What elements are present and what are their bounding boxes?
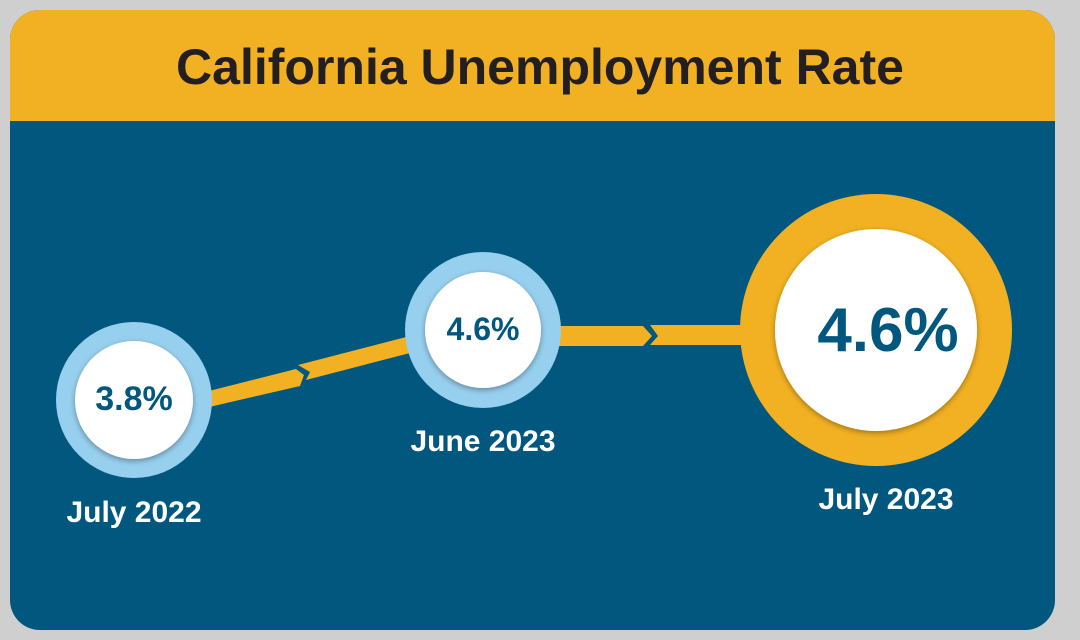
label: July 2022: July 2022 xyxy=(66,496,202,529)
circle: July 2023: 4.6% xyxy=(817,296,959,365)
label: July 2023: July 2023 xyxy=(818,483,954,516)
arrow: June 2023 to July 2023 xyxy=(555,325,760,346)
circle: July 2023 xyxy=(740,194,1012,466)
circle: July 2022: 3.8% xyxy=(95,380,173,418)
circle: July 2022 xyxy=(56,322,212,478)
circle: June 2023: 4.6% xyxy=(447,311,519,347)
title: California Unemployment Rate xyxy=(176,39,904,95)
header band xyxy=(10,10,1055,121)
circle: June 2023 xyxy=(405,252,561,408)
label: June 2023: June 2023 xyxy=(410,425,556,458)
arrow: July 2022 to June 2023 xyxy=(205,336,414,408)
